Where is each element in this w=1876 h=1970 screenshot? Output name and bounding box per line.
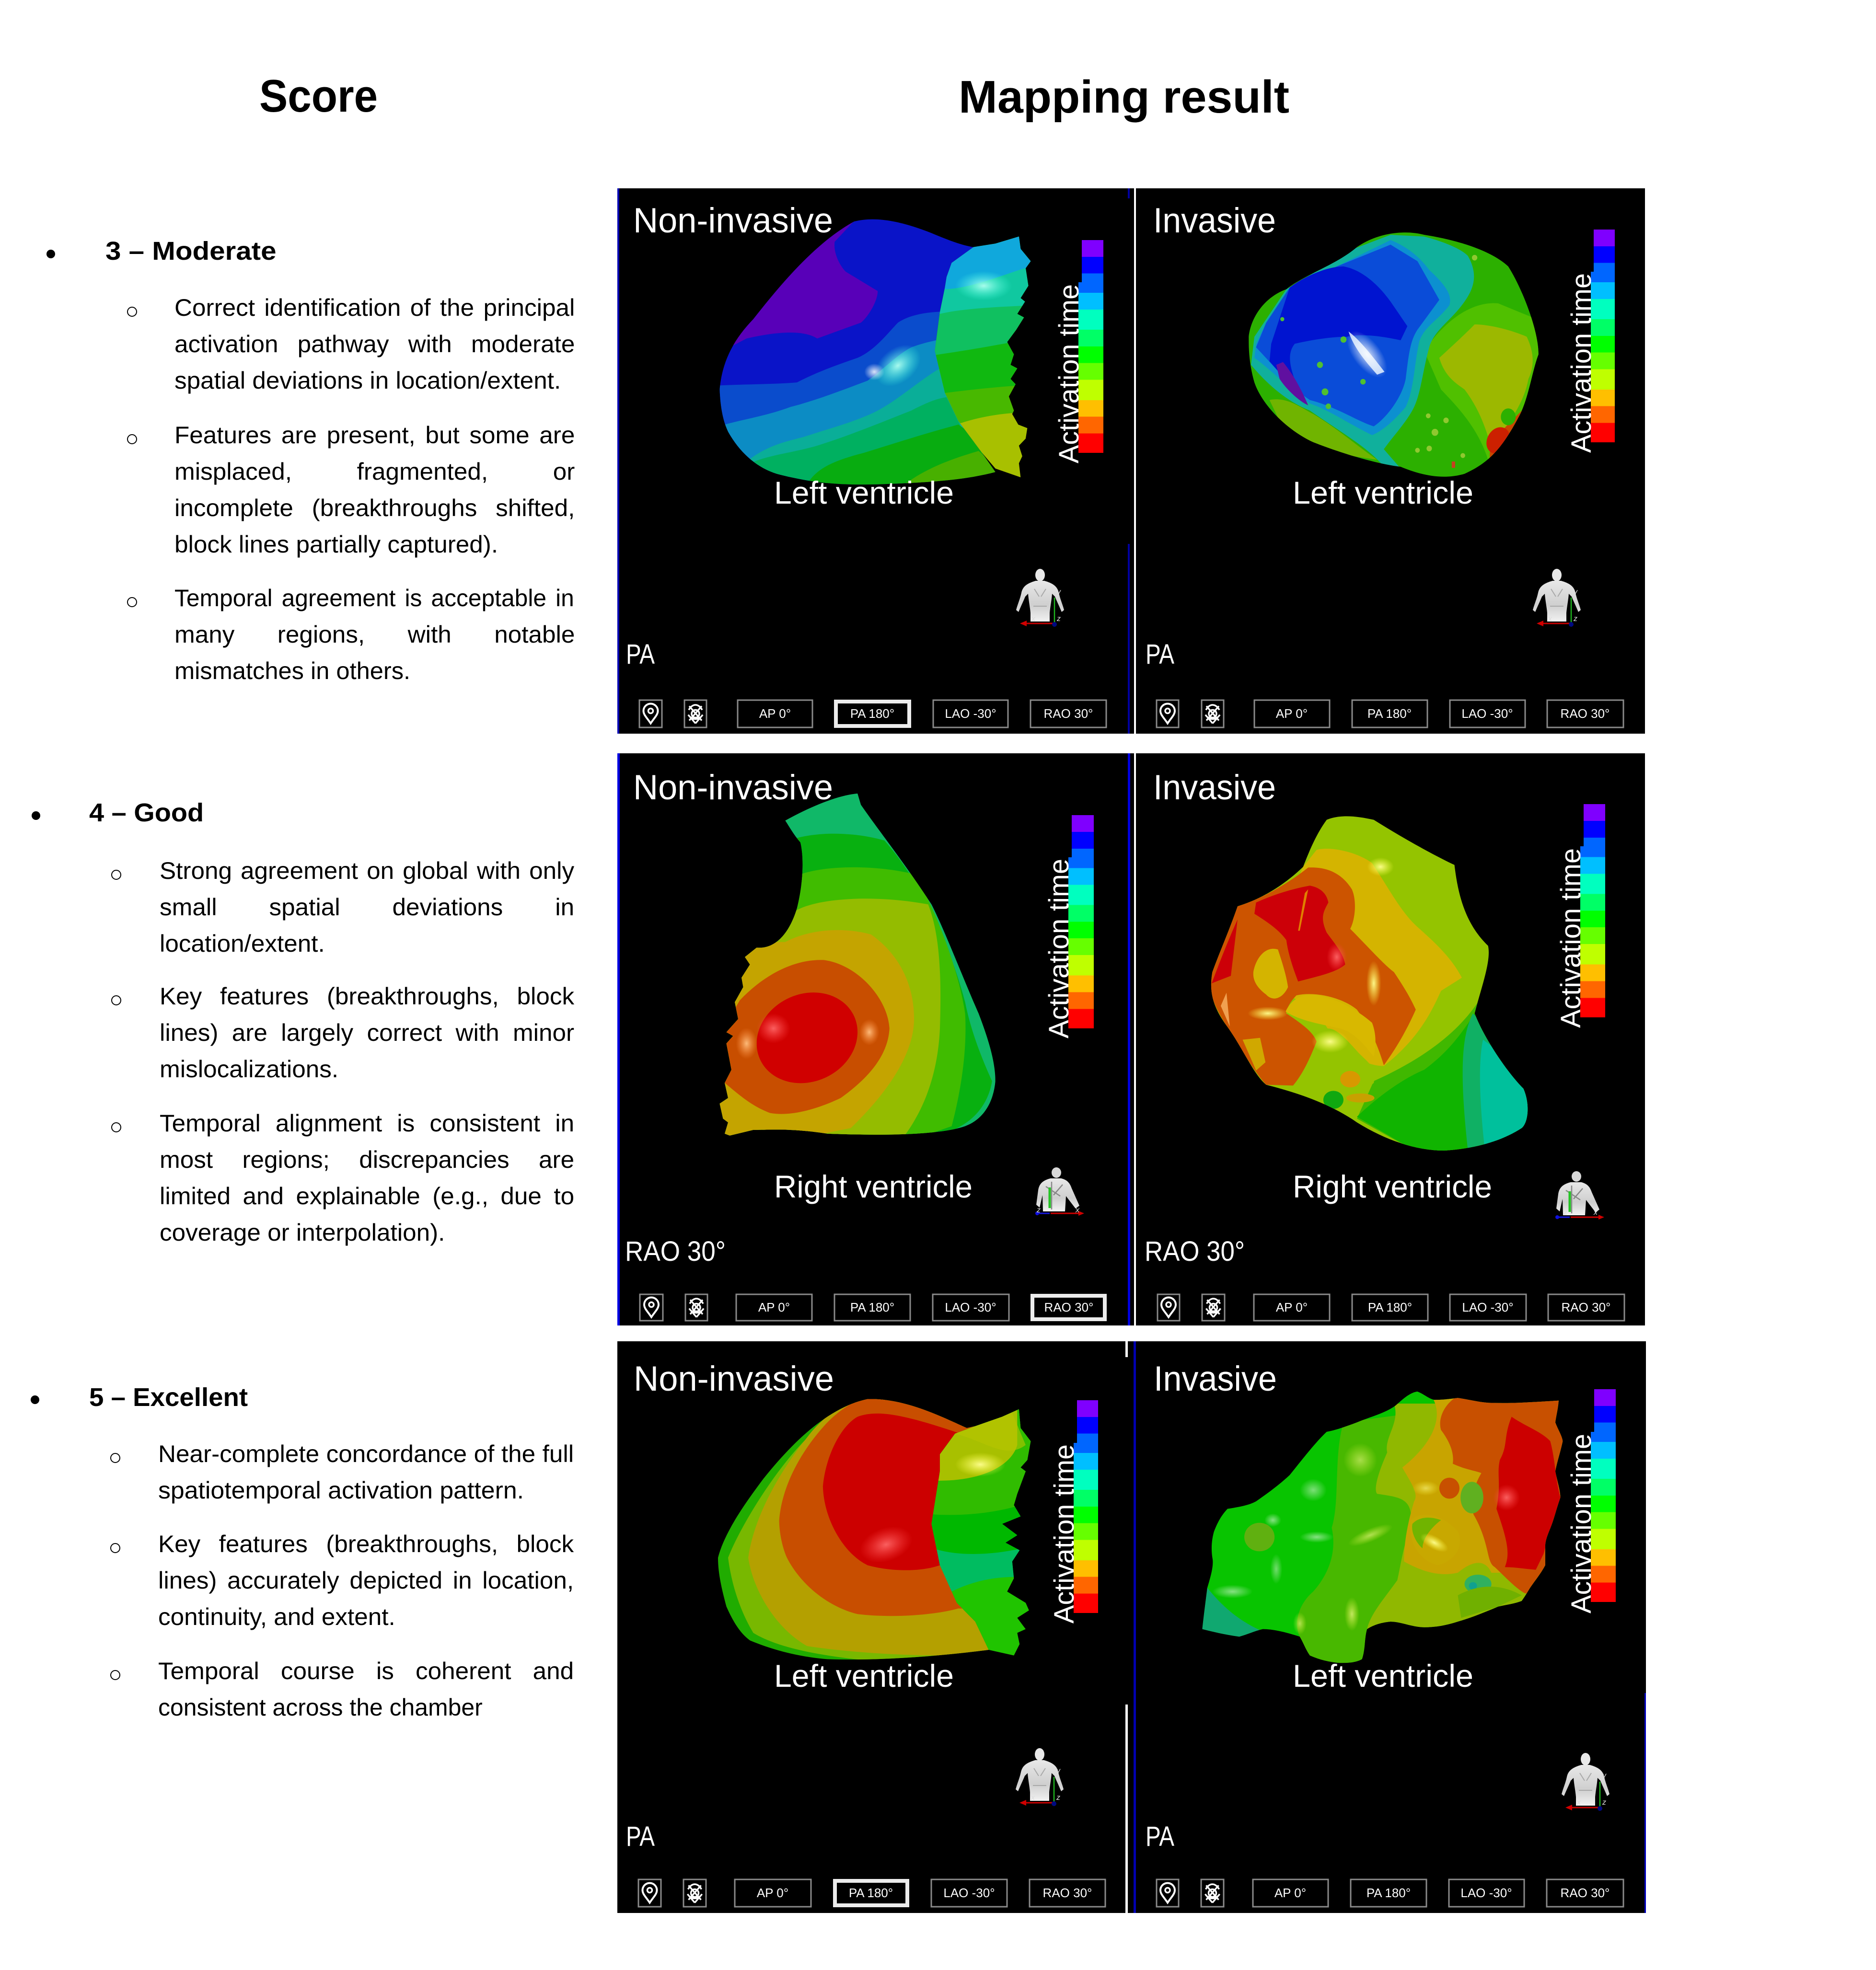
legend: activation time colour bar <box>1591 230 1615 442</box>
text block: 4 – Good <box>0 795 594 1251</box>
button: mesh <box>685 1294 707 1321</box>
icon: torso orientation <box>1533 569 1581 627</box>
text block: 5 – Excellent <box>0 1380 594 1725</box>
heading: 3 – Moderate: 3 – Moderate <box>105 237 277 265</box>
icon: torso orientation: z <box>1602 1798 1606 1807</box>
label: view PA: PA <box>626 1821 655 1852</box>
label: Activation time: Activation time <box>1566 273 1597 453</box>
bullet: concordance: Near-complete concordance of the full <box>158 1440 574 1467</box>
label: view PA: PA <box>1146 1821 1174 1852</box>
icon: torso orientation: x <box>1576 1798 1581 1807</box>
button: AP 0° <box>736 1294 812 1321</box>
button: PA 180° selected <box>836 702 909 726</box>
label: Right ventricle: Right ventricle <box>774 1169 973 1204</box>
bullet: temporal agreement: mismatches in others. <box>174 657 410 684</box>
icon: torso orientation: z <box>1056 1794 1060 1802</box>
bullet: key features: Key features (breakthroughs, block <box>160 983 574 1010</box>
chart: right ventricle activation surface <box>1202 806 1539 1156</box>
label: view RAO 30°: RAO 30° <box>625 1236 726 1267</box>
bullet: global agreement <box>110 853 564 962</box>
bullet: temporal course: consistent across the chamber <box>158 1694 483 1721</box>
button: LAO -30°: LAO -30° <box>1462 1300 1514 1314</box>
bullet: temporal alignment: limited and explainable (e.g., due to <box>160 1183 574 1210</box>
label: Right ventricle: Right ventricle <box>1293 1169 1492 1204</box>
button: LAO -30° <box>933 700 1008 727</box>
button: marker <box>639 700 662 727</box>
bullet: features: misplaced, fragmented, or <box>174 458 575 485</box>
button: RAO 30° selected: RAO 30° <box>1044 1300 1093 1314</box>
button: PA 180°: PA 180° <box>1368 1300 1412 1314</box>
button: mesh <box>684 700 706 727</box>
button: mesh <box>1201 1879 1224 1907</box>
icon: torso orientation: y <box>1056 1767 1061 1775</box>
button: marker <box>638 1879 661 1907</box>
button: PA 180°: PA 180° <box>1366 1886 1411 1900</box>
bullet: principal activation pathway: spatial deviations in location/extent. <box>174 367 561 394</box>
icon: torso orientation: x <box>1593 1209 1598 1217</box>
toolbar: view buttons <box>640 1294 1105 1321</box>
icon: torso orientation <box>1016 1748 1064 1806</box>
bullet: temporal course: Temporal course is coherent and <box>158 1658 574 1684</box>
bullet: features: incomplete (breakthroughs shifted, <box>174 495 575 521</box>
button: AP 0° <box>1254 700 1330 727</box>
button: RAO 30°: RAO 30° <box>1043 1886 1092 1900</box>
panel: row 1 invasive left ventricle <box>1136 188 1645 734</box>
button: LAO -30°: LAO -30° <box>945 1300 996 1314</box>
button: RAO 30° selected <box>1032 1296 1105 1319</box>
panel: row 2 non-invasive right ventricle <box>617 753 1134 1325</box>
label: view PA: PA <box>1146 639 1174 670</box>
toolbar: view buttons <box>1157 1879 1623 1907</box>
button: RAO 30°: RAO 30° <box>1561 1886 1610 1900</box>
bullet: temporal alignment: most regions; discrepancies are <box>160 1146 574 1173</box>
label: view RAO 30°: RAO 30° <box>1145 1236 1245 1267</box>
panel: row 2 invasive right ventricle <box>1136 753 1645 1325</box>
button: AP 0° <box>1254 1294 1330 1321</box>
label: Left ventricle: Left ventricle <box>774 1658 954 1694</box>
icon: torso orientation: x <box>1031 615 1036 623</box>
button: AP 0° <box>738 700 812 727</box>
button: PA 180° selected: PA 180° <box>849 1886 893 1900</box>
button: RAO 30° <box>1547 1879 1623 1907</box>
button: PA 180°: PA 180° <box>850 1300 894 1314</box>
icon: torso orientation <box>1016 569 1064 627</box>
heading: 5 – Excellent: 5 – Excellent <box>89 1383 248 1412</box>
button: marker <box>640 1294 663 1321</box>
button: PA 180° <box>1352 700 1427 727</box>
button: LAO -30° <box>931 1879 1007 1907</box>
chart: left ventricle activation surface <box>1243 224 1545 484</box>
bullet: features: Features are present, but some are <box>174 422 575 449</box>
button: RAO 30° <box>1031 700 1106 727</box>
bullet: key features: continuity, and extent. <box>158 1603 395 1630</box>
bullet: temporal alignment <box>110 1105 564 1251</box>
bullet: temporal agreement: Temporal agreement is acceptable in <box>174 585 574 611</box>
bullet: temporal course <box>109 1653 564 1726</box>
icon: torso orientation: x <box>1548 615 1552 623</box>
label: Activation time: Activation time <box>1043 859 1075 1038</box>
button: AP 0°: AP 0° <box>1274 1886 1306 1900</box>
label: Activation time: Activation time <box>1054 284 1085 463</box>
button: LAO -30° <box>933 1294 1009 1321</box>
label: Activation time: Activation time <box>1566 1434 1597 1613</box>
label: Activation time: Activation time <box>1555 848 1586 1028</box>
heading: Score: Score <box>259 70 378 122</box>
button: RAO 30° <box>1547 700 1623 727</box>
text block: 3 – Moderate <box>0 235 594 690</box>
legend: activation time colour bar <box>1591 1389 1616 1602</box>
panel: row 3 invasive left ventricle <box>1128 1341 1646 1913</box>
icon: torso orientation: x <box>1075 1206 1080 1214</box>
button: PA 180° <box>834 1294 910 1321</box>
label: Non-invasive: Non-invasive <box>633 201 833 240</box>
icon: torso orientation: z <box>1036 1206 1041 1214</box>
toolbar: view buttons <box>1157 700 1623 727</box>
bullet: key features <box>110 978 564 1087</box>
button: marker <box>1158 1294 1180 1321</box>
button: RAO 30°: RAO 30° <box>1561 706 1610 721</box>
bullet: key features: lines) accurately depicted in location, <box>158 1567 574 1594</box>
icon: torso orientation: y <box>1056 588 1061 596</box>
label: Invasive: Invasive <box>1153 201 1276 240</box>
icon: torso orientation <box>1035 1167 1084 1216</box>
bullet: concordance: spatiotemporal activation pattern. <box>158 1477 524 1504</box>
button: RAO 30° <box>1548 1294 1624 1321</box>
button: AP 0° <box>1253 1879 1328 1907</box>
bullet: key features: Key features (breakthroughs, block <box>158 1531 574 1557</box>
icon: torso orientation: x <box>1031 1794 1035 1802</box>
button: AP 0°: AP 0° <box>1276 1300 1308 1314</box>
bullet: global agreement: location/extent. <box>160 930 325 957</box>
toolbar: view buttons <box>1158 1294 1624 1321</box>
icon: torso orientation: y <box>1573 588 1578 596</box>
icon: torso orientation <box>1555 1171 1604 1220</box>
button: LAO -30°: LAO -30° <box>1461 706 1513 721</box>
button: LAO -30° <box>1450 1294 1526 1321</box>
label: Left ventricle: Left ventricle <box>774 475 954 510</box>
icon: torso orientation <box>1562 1753 1610 1811</box>
button: PA 180°: PA 180° <box>1367 706 1412 721</box>
button: RAO 30°: RAO 30° <box>1044 706 1093 721</box>
bullet: principal activation pathway <box>126 289 565 399</box>
chart: left ventricle activation surface <box>720 219 1031 485</box>
chart: left ventricle activation surface <box>718 1399 1031 1660</box>
label: Left ventricle: Left ventricle <box>1293 1658 1473 1694</box>
label: Invasive: Invasive <box>1153 768 1276 807</box>
button: RAO 30°: RAO 30° <box>1562 1300 1610 1314</box>
bullet: temporal alignment: coverage or interpolation). <box>160 1219 445 1246</box>
bullet: key features: mislocalizations. <box>160 1056 338 1083</box>
legend: activation time colour bar <box>1078 240 1103 453</box>
button: AP 0°: AP 0° <box>757 1886 788 1900</box>
button: AP 0° <box>735 1879 811 1907</box>
button: marker <box>1157 700 1179 727</box>
legend: activation time colour bar <box>1074 1400 1098 1613</box>
icon: torso orientation: y <box>1602 1772 1607 1780</box>
bullet: global agreement: small spatial deviations in <box>160 894 574 921</box>
chart: left ventricle activation surface <box>1195 1385 1575 1670</box>
panel: row 1 non-invasive left ventricle <box>617 188 1134 734</box>
chart: right ventricle activation surface <box>720 794 996 1136</box>
label: Invasive: Invasive <box>1154 1359 1277 1398</box>
toolbar: view buttons <box>638 1879 1105 1907</box>
button: mesh <box>683 1879 706 1907</box>
label: Non-invasive: Non-invasive <box>634 1359 834 1398</box>
bullet: features: block lines partially captured). <box>174 531 498 558</box>
icon: torso orientation: z <box>1573 615 1577 623</box>
button: marker <box>1157 1879 1179 1907</box>
bullet: global agreement: Strong agreement on global with only <box>160 857 574 884</box>
toolbar: view buttons <box>639 700 1106 727</box>
bullet: temporal alignment: Temporal alignment is consistent in <box>160 1110 574 1137</box>
bullet: features <box>126 417 565 563</box>
heading: Mapping result: Mapping result <box>959 71 1289 123</box>
label: Non-invasive: Non-invasive <box>633 768 833 807</box>
icon: torso orientation: z <box>1056 615 1061 623</box>
legend: activation time colour bar <box>1068 815 1094 1028</box>
button: PA 180° selected <box>835 1881 907 1905</box>
label: Left ventricle: Left ventricle <box>1293 475 1473 510</box>
button: PA 180° selected: PA 180° <box>850 706 894 721</box>
icon: torso orientation: z <box>1563 1209 1567 1217</box>
button: LAO -30°: LAO -30° <box>943 1886 995 1900</box>
bullet: concordance <box>109 1436 564 1509</box>
button: PA 180° <box>1351 1879 1426 1907</box>
bullet: principal activation pathway: Correct identification of the principal <box>174 294 575 321</box>
bullet: temporal agreement <box>126 580 576 689</box>
bullet: key features <box>109 1526 564 1635</box>
label: view PA: PA <box>626 639 655 670</box>
bullet: key features: lines) are largely correct with minor <box>160 1019 574 1046</box>
button: AP 0°: AP 0° <box>759 706 791 721</box>
button: AP 0°: AP 0° <box>758 1300 790 1314</box>
panel: row 3 non-invasive left ventricle <box>617 1341 1128 1913</box>
button: LAO -30°: LAO -30° <box>945 706 996 721</box>
button: RAO 30° <box>1030 1879 1105 1907</box>
button: LAO -30° <box>1449 1879 1524 1907</box>
button: AP 0°: AP 0° <box>1276 706 1308 721</box>
bullet: temporal agreement: many regions, with notable <box>174 621 575 648</box>
bullet: principal activation pathway: activation pathway with moderate <box>174 331 575 357</box>
button: mesh <box>1202 1294 1225 1321</box>
heading: 4 – Good: 4 – Good <box>89 798 204 827</box>
button: PA 180° <box>1352 1294 1428 1321</box>
button: LAO -30° <box>1450 700 1525 727</box>
button: LAO -30°: LAO -30° <box>1460 1886 1512 1900</box>
button: mesh <box>1202 700 1224 727</box>
label: Activation time: Activation time <box>1049 1444 1080 1624</box>
legend: activation time colour bar <box>1580 804 1605 1017</box>
